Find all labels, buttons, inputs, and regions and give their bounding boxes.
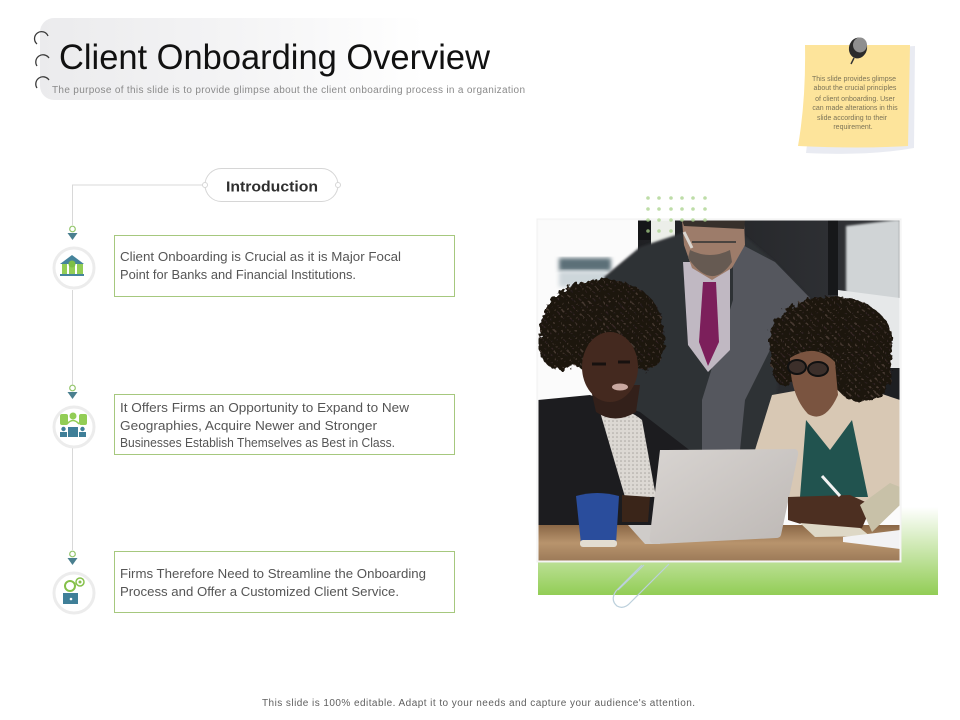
photo: woman on right (755, 296, 900, 505)
note text: of client onboarding. User (815, 96, 896, 103)
note text: requirement. (833, 124, 873, 131)
icon: people and buildings (60, 412, 87, 437)
photo inner border (538, 220, 900, 561)
step 2 text box: It Offers Firms an Opportunity to Expand to New (120, 400, 410, 415)
introduction pill: Introduction (226, 178, 318, 196)
step 2 marker (54, 385, 94, 447)
photo: laptop (628, 449, 798, 544)
connector line (72, 185, 205, 550)
footer note: This slide is 100% editable. Adapt it to your needs and capture your audience's attention. (262, 698, 695, 709)
photo: man in suit (602, 220, 810, 450)
note text: This slide provides glimpse (812, 76, 896, 83)
icon: binder rings (35, 32, 49, 88)
icon: push pin (847, 36, 869, 64)
icon: bank (60, 255, 84, 276)
step 3 text box: Firms Therefore Need to Streamline the Onboarding (120, 566, 426, 581)
title: Client Onboarding Overview (59, 38, 491, 77)
photo: woman on left (538, 279, 692, 530)
sticky note (798, 36, 915, 154)
step 3 marker (54, 551, 94, 613)
introduction pill (202, 168, 340, 202)
photo: table (538, 525, 900, 561)
photo: hands and notebook (622, 476, 900, 549)
icon: paperclip (613, 564, 669, 607)
note text: can made alterations in this (812, 105, 898, 112)
step 1 text box (114, 236, 454, 296)
green gradient panel (538, 507, 938, 595)
photo background (555, 220, 900, 400)
step 3 text box: Process and Offer a Customized Client Service. (120, 584, 399, 599)
step 2 text box: Geographies, Acquire Newer and Stronger (120, 418, 378, 433)
step 2 text box (114, 394, 454, 454)
decorative dot grid (646, 196, 707, 233)
photo: blue mug (576, 493, 619, 547)
note text: about the crucial principles (814, 85, 897, 92)
step 3 text box (114, 552, 454, 612)
step 1 text box: Client Onboarding is Crucial as it is Major Focal (120, 249, 401, 264)
note text: slide according to their (817, 115, 888, 122)
step 2 text box: Businesses Establish Themselves as Best in Class. (120, 435, 395, 450)
step 1 marker (54, 226, 94, 288)
icon: client at laptop (63, 578, 84, 604)
subtitle: The purpose of this slide is to provide glimpse about the client onboarding process in a organization (52, 85, 525, 96)
header band (35, 18, 425, 100)
photo: business team at laptop (537, 219, 901, 562)
note text (812, 76, 898, 131)
step 1 text box: Point for Banks and Financial Institutions. (120, 267, 356, 282)
